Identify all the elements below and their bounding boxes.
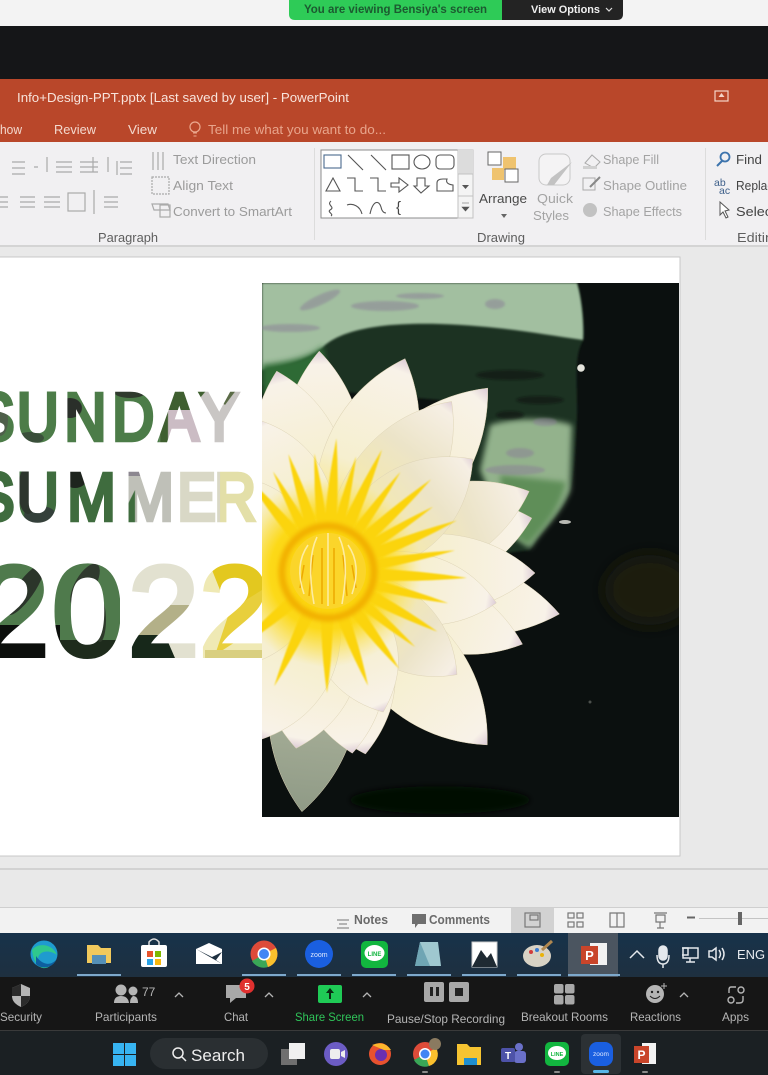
icon: paint bbox=[523, 941, 552, 967]
icon: apps bbox=[728, 987, 744, 1003]
lily pad bbox=[260, 283, 583, 560]
editing group: Find bbox=[736, 152, 762, 167]
quick styles button bbox=[533, 154, 574, 223]
zoom toolbar bbox=[0, 977, 768, 1031]
zoom toolbar: Share Screen bbox=[295, 1010, 364, 1024]
icon: chrome bbox=[250, 940, 278, 968]
editing group: ac bbox=[719, 185, 730, 197]
paragraph group bbox=[0, 152, 292, 245]
icon: file explorer bbox=[87, 945, 111, 964]
icon: pause stop recording bbox=[424, 982, 469, 1002]
editing group bbox=[714, 152, 768, 245]
lily stamen bbox=[262, 438, 467, 693]
icon: powerpoint: P bbox=[585, 948, 594, 963]
icon: notes app bbox=[415, 942, 441, 966]
icon: line taskbar bbox=[545, 1042, 569, 1066]
icon: zoom: zoom bbox=[310, 952, 328, 959]
slide bbox=[0, 257, 680, 856]
search box: Search bbox=[191, 1046, 245, 1065]
screen sharing banner: You are viewing Bensiya's screen bbox=[304, 4, 487, 16]
ribbon tabs: Tell me what you want to do... bbox=[208, 122, 386, 137]
zoom toolbar: Reactions bbox=[630, 1010, 681, 1024]
running indicators bbox=[422, 1071, 648, 1073]
icon: folder bbox=[457, 1044, 481, 1065]
arrange button bbox=[479, 152, 527, 218]
icon: chat bbox=[226, 978, 254, 1003]
icon: task view bbox=[281, 1043, 305, 1065]
icon: share screen bbox=[318, 985, 342, 1003]
paragraph group: Convert to SmartArt bbox=[173, 204, 292, 219]
icon: zoom taskbar: zoom bbox=[593, 1051, 609, 1058]
ribbon panel bbox=[0, 142, 768, 247]
PowerPoint title bar: Info+Design-PPT.pptx [Last saved by user] - PowerPoint bbox=[17, 90, 349, 105]
search box bbox=[150, 1038, 268, 1069]
shapes gallery: { bbox=[396, 199, 401, 216]
icon: reactions bbox=[646, 983, 667, 1003]
icon: firefox bbox=[369, 1043, 391, 1065]
water droplets bbox=[559, 364, 592, 704]
shape format commands: Drawing bbox=[477, 231, 525, 245]
zoom toolbar: 77 bbox=[142, 985, 156, 999]
zoom toolbar: Pause/Stop Recording bbox=[387, 1012, 505, 1026]
icon: zoom taskbar bbox=[581, 1034, 621, 1074]
screen sharing banner bbox=[289, 0, 623, 20]
icon: breakout rooms bbox=[554, 984, 574, 1004]
windows app taskbar bbox=[0, 933, 768, 977]
slide canvas area bbox=[0, 247, 768, 908]
lily flower petals bbox=[262, 351, 560, 812]
quick styles button: Styles bbox=[533, 208, 570, 223]
zoom toolbar: Security bbox=[0, 1010, 42, 1024]
paragraph group: Align Text bbox=[173, 178, 233, 193]
arrange button: Arrange bbox=[479, 191, 527, 206]
icon: teams: T bbox=[505, 1051, 511, 1062]
PowerPoint title bar bbox=[0, 79, 768, 142]
water lily photo bbox=[262, 283, 679, 817]
zoom toolbar: Apps bbox=[722, 1010, 749, 1024]
paragraph group: Text Direction bbox=[173, 152, 256, 167]
icon: chevrons bbox=[175, 993, 688, 997]
screen background bbox=[0, 0, 768, 79]
zoom toolbar: Chat bbox=[224, 1010, 249, 1024]
ribbon tabs bbox=[0, 122, 386, 137]
ribbon tabs: View bbox=[128, 122, 158, 137]
icon: line: LINE bbox=[368, 952, 381, 958]
icon: powerpoint taskbar bbox=[634, 1043, 656, 1064]
icon: photos bbox=[472, 942, 497, 967]
editing group: ab bbox=[714, 177, 726, 189]
zoom toolbar: Breakout Rooms bbox=[521, 1010, 608, 1024]
shapes gallery bbox=[321, 150, 473, 218]
icon: security shield bbox=[12, 984, 30, 1007]
status bar: Notes bbox=[354, 913, 388, 927]
zoom toolbar: Participants bbox=[95, 1010, 157, 1024]
icon: edge bbox=[30, 940, 58, 968]
screen sharing banner: View Options bbox=[531, 4, 600, 16]
ribbon tabs: how bbox=[0, 122, 23, 137]
quick styles button: Quick bbox=[537, 191, 574, 206]
shape format commands: Shape Fill bbox=[603, 152, 659, 167]
slide title text filled with photo bbox=[0, 380, 270, 684]
status bar bbox=[0, 907, 768, 933]
windows taskbar bbox=[0, 1031, 768, 1075]
paragraph group: Paragraph bbox=[98, 231, 158, 245]
icon: line taskbar: LINE bbox=[551, 1052, 564, 1058]
icon: line bbox=[361, 941, 388, 968]
icon: powerpoint bbox=[581, 943, 607, 965]
icon: powerpoint taskbar: P bbox=[637, 1048, 646, 1062]
icon: store bbox=[141, 939, 167, 967]
system tray bbox=[630, 946, 724, 968]
icon: chat: 5 bbox=[244, 982, 250, 993]
icon: windows logo bbox=[113, 1043, 136, 1066]
ribbon tabs: Review bbox=[54, 122, 97, 137]
shape format commands bbox=[477, 152, 687, 245]
icon: meet bbox=[324, 1042, 348, 1066]
icon: zoom bbox=[305, 940, 333, 968]
windows app taskbar: ENG bbox=[737, 947, 765, 962]
icon: teams bbox=[501, 1043, 526, 1063]
shape format commands: Shape Effects bbox=[603, 204, 682, 219]
shape format commands: Shape Outline bbox=[603, 178, 687, 193]
icon: participants bbox=[114, 984, 138, 1003]
status bar: Comments bbox=[429, 913, 490, 927]
icon: mail bbox=[196, 943, 222, 964]
icon: chrome taskbar bbox=[413, 1038, 441, 1067]
